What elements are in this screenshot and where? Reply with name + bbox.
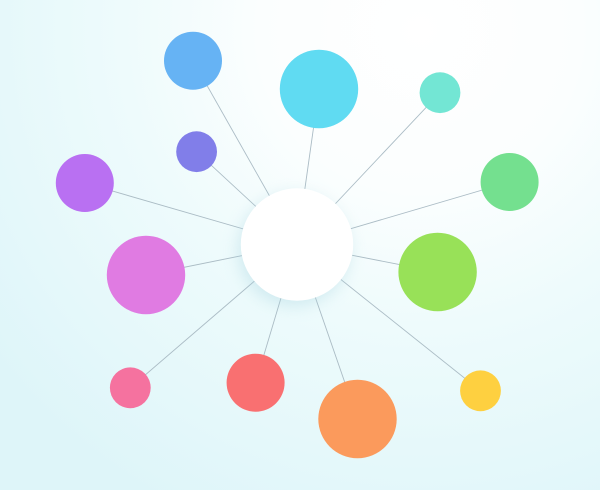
circle: turquoise: [420, 72, 460, 113]
circle: green: [481, 153, 539, 211]
circle: indigo: [176, 131, 217, 172]
circle: red: [227, 354, 285, 412]
circle: pink: [110, 367, 151, 408]
circle: yellow: [460, 370, 501, 411]
circle: cyan: [280, 50, 358, 128]
spokes: [85, 61, 510, 419]
hub shadow: [238, 194, 350, 306]
circle: orchid: [107, 236, 185, 314]
circle: purple: [56, 154, 114, 212]
central hub circle: [241, 188, 353, 301]
circle: orange: [318, 380, 397, 458]
circle: blue: [164, 32, 222, 90]
circle: lime: [398, 233, 477, 311]
